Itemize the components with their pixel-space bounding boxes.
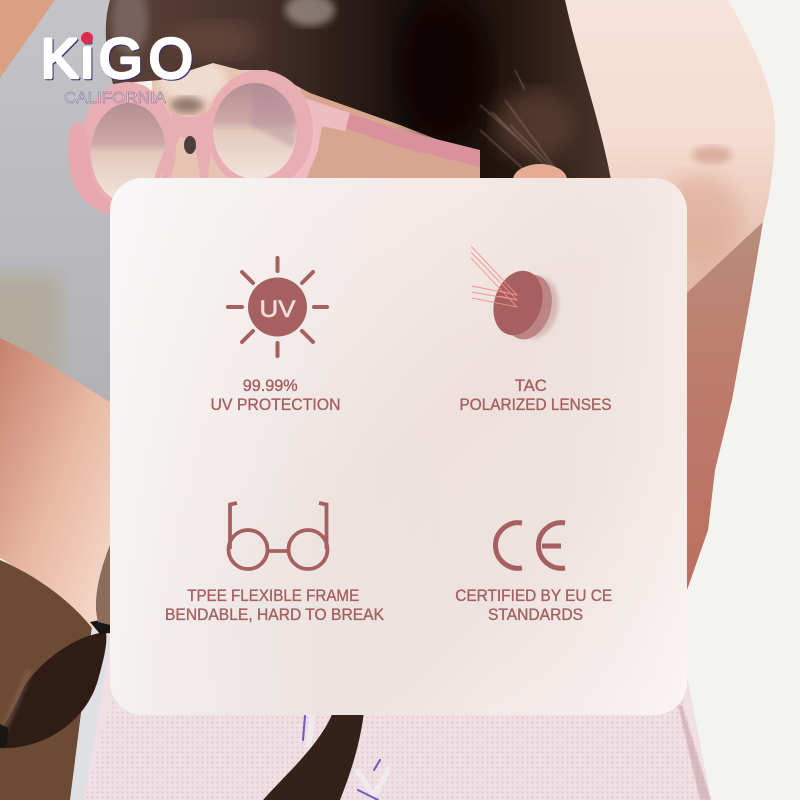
icon: glasses [228, 503, 328, 569]
feature: CE certified [455, 523, 617, 624]
ear [513, 164, 567, 196]
label: TAC polarized lenses: POLARIZED LENSES [460, 396, 612, 414]
label: UV protection: 99.99% [243, 377, 298, 395]
left frame [80, 82, 176, 214]
logo subtitle: CALIFORNIA [64, 90, 167, 107]
label: CE certified: CERTIFIED BY EU CE [455, 587, 612, 605]
icon: CE mark [496, 523, 565, 568]
temple arm [322, 104, 480, 167]
feature: TPEE flexible frame [165, 503, 384, 624]
logo wordmark: KiGO [41, 26, 193, 90]
dark background at lower left [0, 560, 92, 800]
forearm shadow [680, 222, 763, 590]
feature: UV protection [210, 258, 340, 414]
nose gap [184, 136, 196, 154]
left wing [68, 122, 110, 215]
icon: UV sun [228, 258, 327, 356]
left lens [91, 103, 166, 203]
right hinge [290, 98, 350, 182]
ponytail left [0, 545, 110, 748]
icon: polarized lens [471, 246, 565, 345]
feature: TAC polarized lenses [460, 246, 612, 414]
panel: frosted feature card [110, 178, 687, 715]
icon: UV sun: UV [260, 296, 296, 323]
hair highlight strands [480, 70, 560, 175]
bridge [154, 110, 212, 178]
logo shadow text: KiGO [42, 28, 194, 90]
label: UV protection: UV PROTECTION [210, 396, 340, 414]
right arm [560, 0, 775, 720]
raised left forearm [0, 0, 55, 78]
backdrop left wall [0, 0, 115, 410]
card base [110, 178, 687, 715]
white sleeve strip [70, 626, 115, 800]
label: TAC polarized lenses: TAC [515, 377, 547, 395]
right lens mauve reflection [250, 86, 296, 148]
elbow shading [692, 146, 732, 164]
sunglasses [68, 70, 480, 215]
hair [106, 0, 611, 180]
shirt [84, 640, 711, 800]
face skin [150, 55, 490, 190]
logo dot [81, 32, 93, 44]
right frame [207, 70, 313, 190]
background cover right [686, 590, 800, 800]
card sheen [110, 178, 687, 715]
right lens [213, 83, 297, 179]
shirt V-neck trim [303, 716, 388, 800]
hair tones [112, 0, 575, 160]
label: TPEE flexible frame: BENDABLE, HARD TO BREAK [165, 606, 384, 624]
label: TPEE flexible frame: TPEE FLEXIBLE FRAME [187, 587, 359, 605]
left arm and shoulder [0, 336, 115, 640]
ponytail bottom [263, 712, 364, 800]
label: CE certified: STANDARDS [488, 606, 583, 624]
logo: KiGO California [41, 26, 194, 107]
